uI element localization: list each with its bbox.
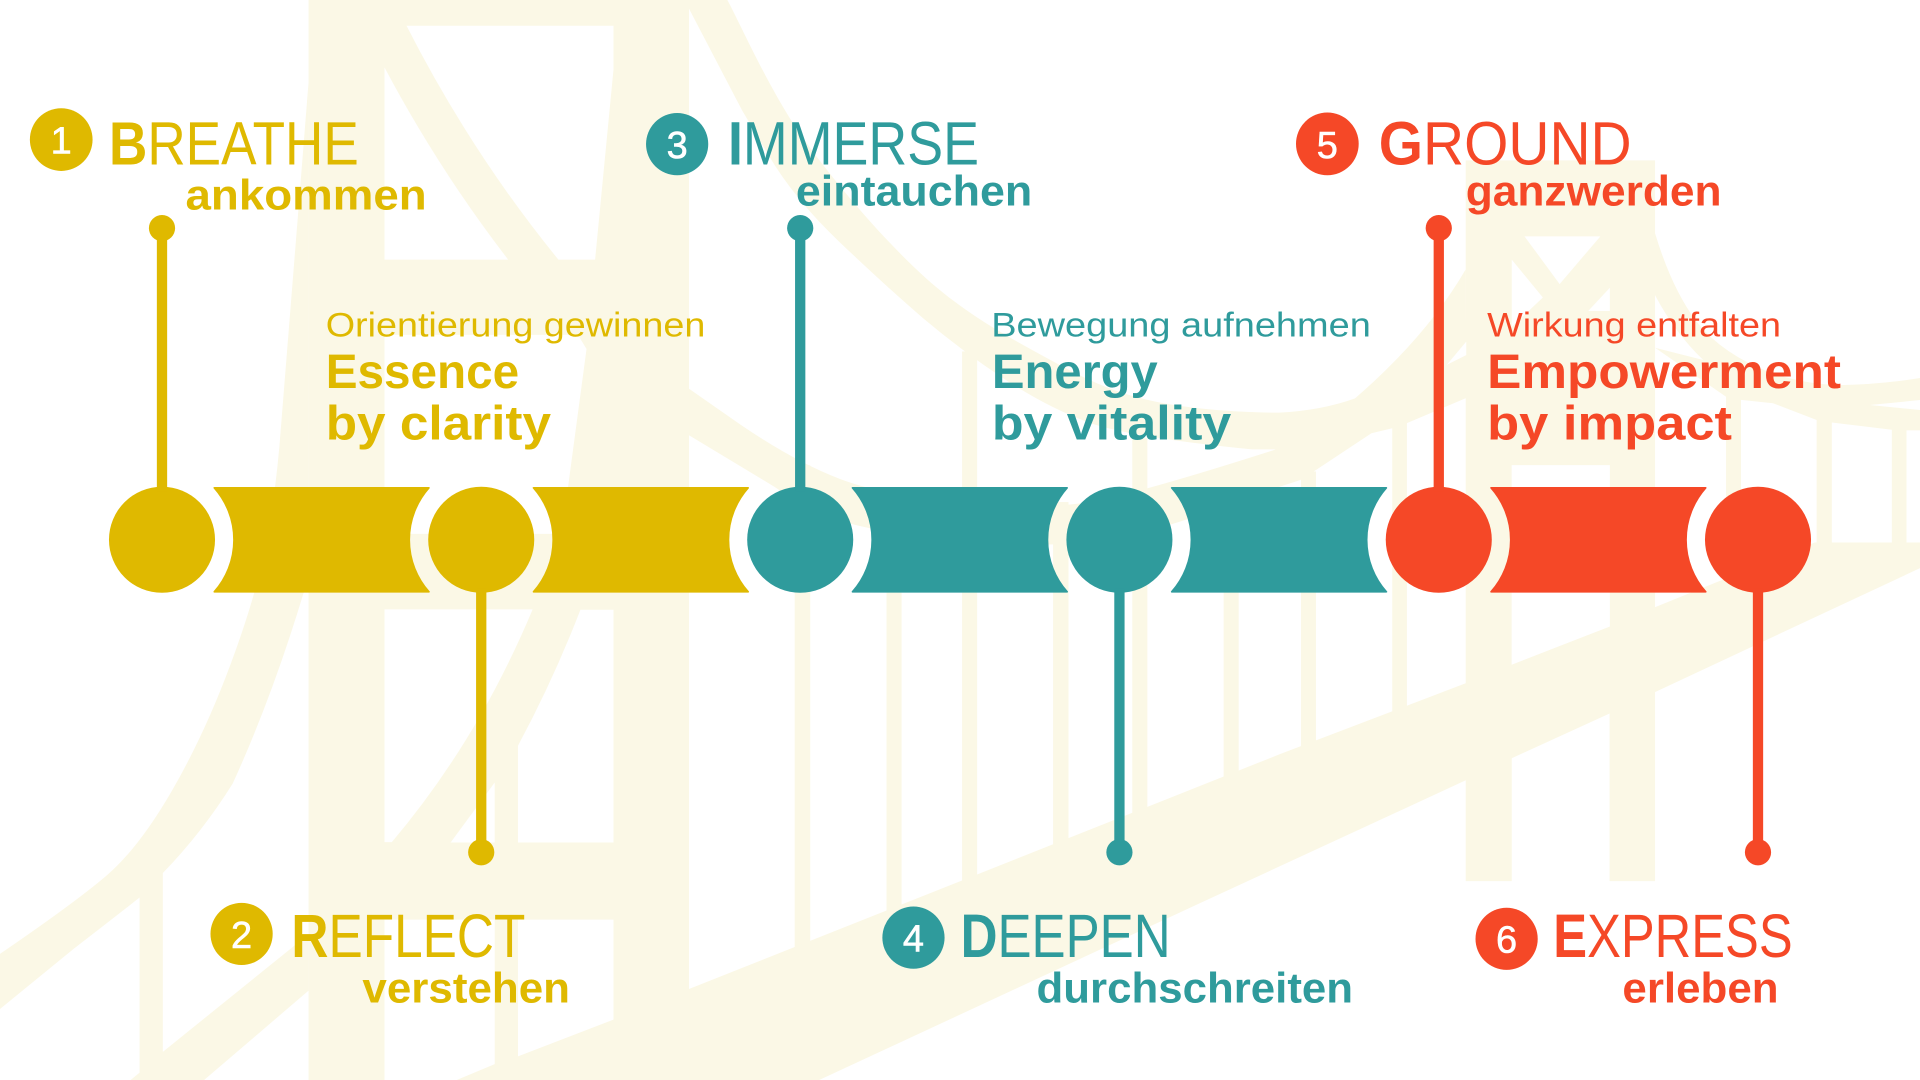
phase text: essence by clarity <box>326 307 705 451</box>
number badge 6: 6 <box>1496 920 1517 962</box>
subheading: verstehen: verstehen <box>362 964 570 1012</box>
title: by clarity: by clarity <box>326 398 551 451</box>
number badge 5: 5 <box>1317 125 1338 167</box>
heading: ground: GROUND <box>1379 110 1632 178</box>
subheading: durchschreiten: durchschreiten <box>1037 964 1353 1012</box>
bar 5 <box>1491 488 1706 592</box>
phase text: empowerment by impact <box>1487 307 1841 451</box>
heading: deepen: DEEPEN <box>961 902 1171 970</box>
node and stem 4 <box>1066 487 1172 865</box>
caption: orientierung gewinnen: Orientierung gewinnen <box>326 307 705 345</box>
node and stem 5 <box>1386 215 1492 593</box>
subheading: ganzwerden: ganzwerden <box>1466 167 1722 215</box>
phase text: energy by vitality <box>991 307 1371 451</box>
heading: breathe: BREATHE <box>109 110 359 178</box>
title: by impact: by impact <box>1487 398 1732 451</box>
number badge 4: 4 <box>903 918 924 960</box>
bar 1 <box>214 488 429 592</box>
node and stem 1 <box>109 215 215 593</box>
caption: wirkung entfalten: Wirkung entfalten <box>1487 307 1781 345</box>
step 1: breathe <box>30 108 427 593</box>
node and stem 6 <box>1705 487 1811 865</box>
step 2: reflect <box>210 487 570 1012</box>
number badge 2 <box>210 903 273 965</box>
bar 3 <box>852 488 1067 592</box>
subheading: eintauchen: eintauchen <box>796 167 1032 215</box>
caption: bewegung aufnehmen: Bewegung aufnehmen <box>991 307 1371 345</box>
number badge 3: 3 <box>667 125 688 167</box>
number badge 2: 2 <box>231 915 252 957</box>
number badge 4 <box>882 906 945 969</box>
title: essence: Essence <box>326 346 519 399</box>
title: by vitality: by vitality <box>992 398 1232 451</box>
subheading: ankommen: ankommen <box>186 171 427 219</box>
number badge 3 <box>646 113 708 175</box>
heading: immerse: IMMERSE <box>728 110 979 178</box>
number badge 1 <box>30 108 93 171</box>
node and stem 3 <box>747 215 853 593</box>
heading: reflect: REFLECT <box>291 902 525 970</box>
step 4: deepen <box>882 487 1353 1012</box>
title: energy: Energy <box>992 346 1158 399</box>
bar 4 <box>1172 488 1386 592</box>
step 5: ground <box>1296 110 1722 593</box>
step 6: express <box>1476 487 1811 1012</box>
node and stem 2 <box>428 487 534 865</box>
number badge 5 <box>1296 113 1359 175</box>
subheading: erleben: erleben <box>1622 964 1779 1012</box>
number badge 1: 1 <box>51 121 72 163</box>
heading: express: EXPRESS <box>1553 902 1793 970</box>
number badge 6 <box>1476 908 1538 970</box>
bar 2 <box>534 488 748 592</box>
timeline: connector bars <box>214 488 1706 592</box>
step 3: immerse <box>646 110 1032 593</box>
title: empowerment: Empowerment <box>1487 346 1841 399</box>
